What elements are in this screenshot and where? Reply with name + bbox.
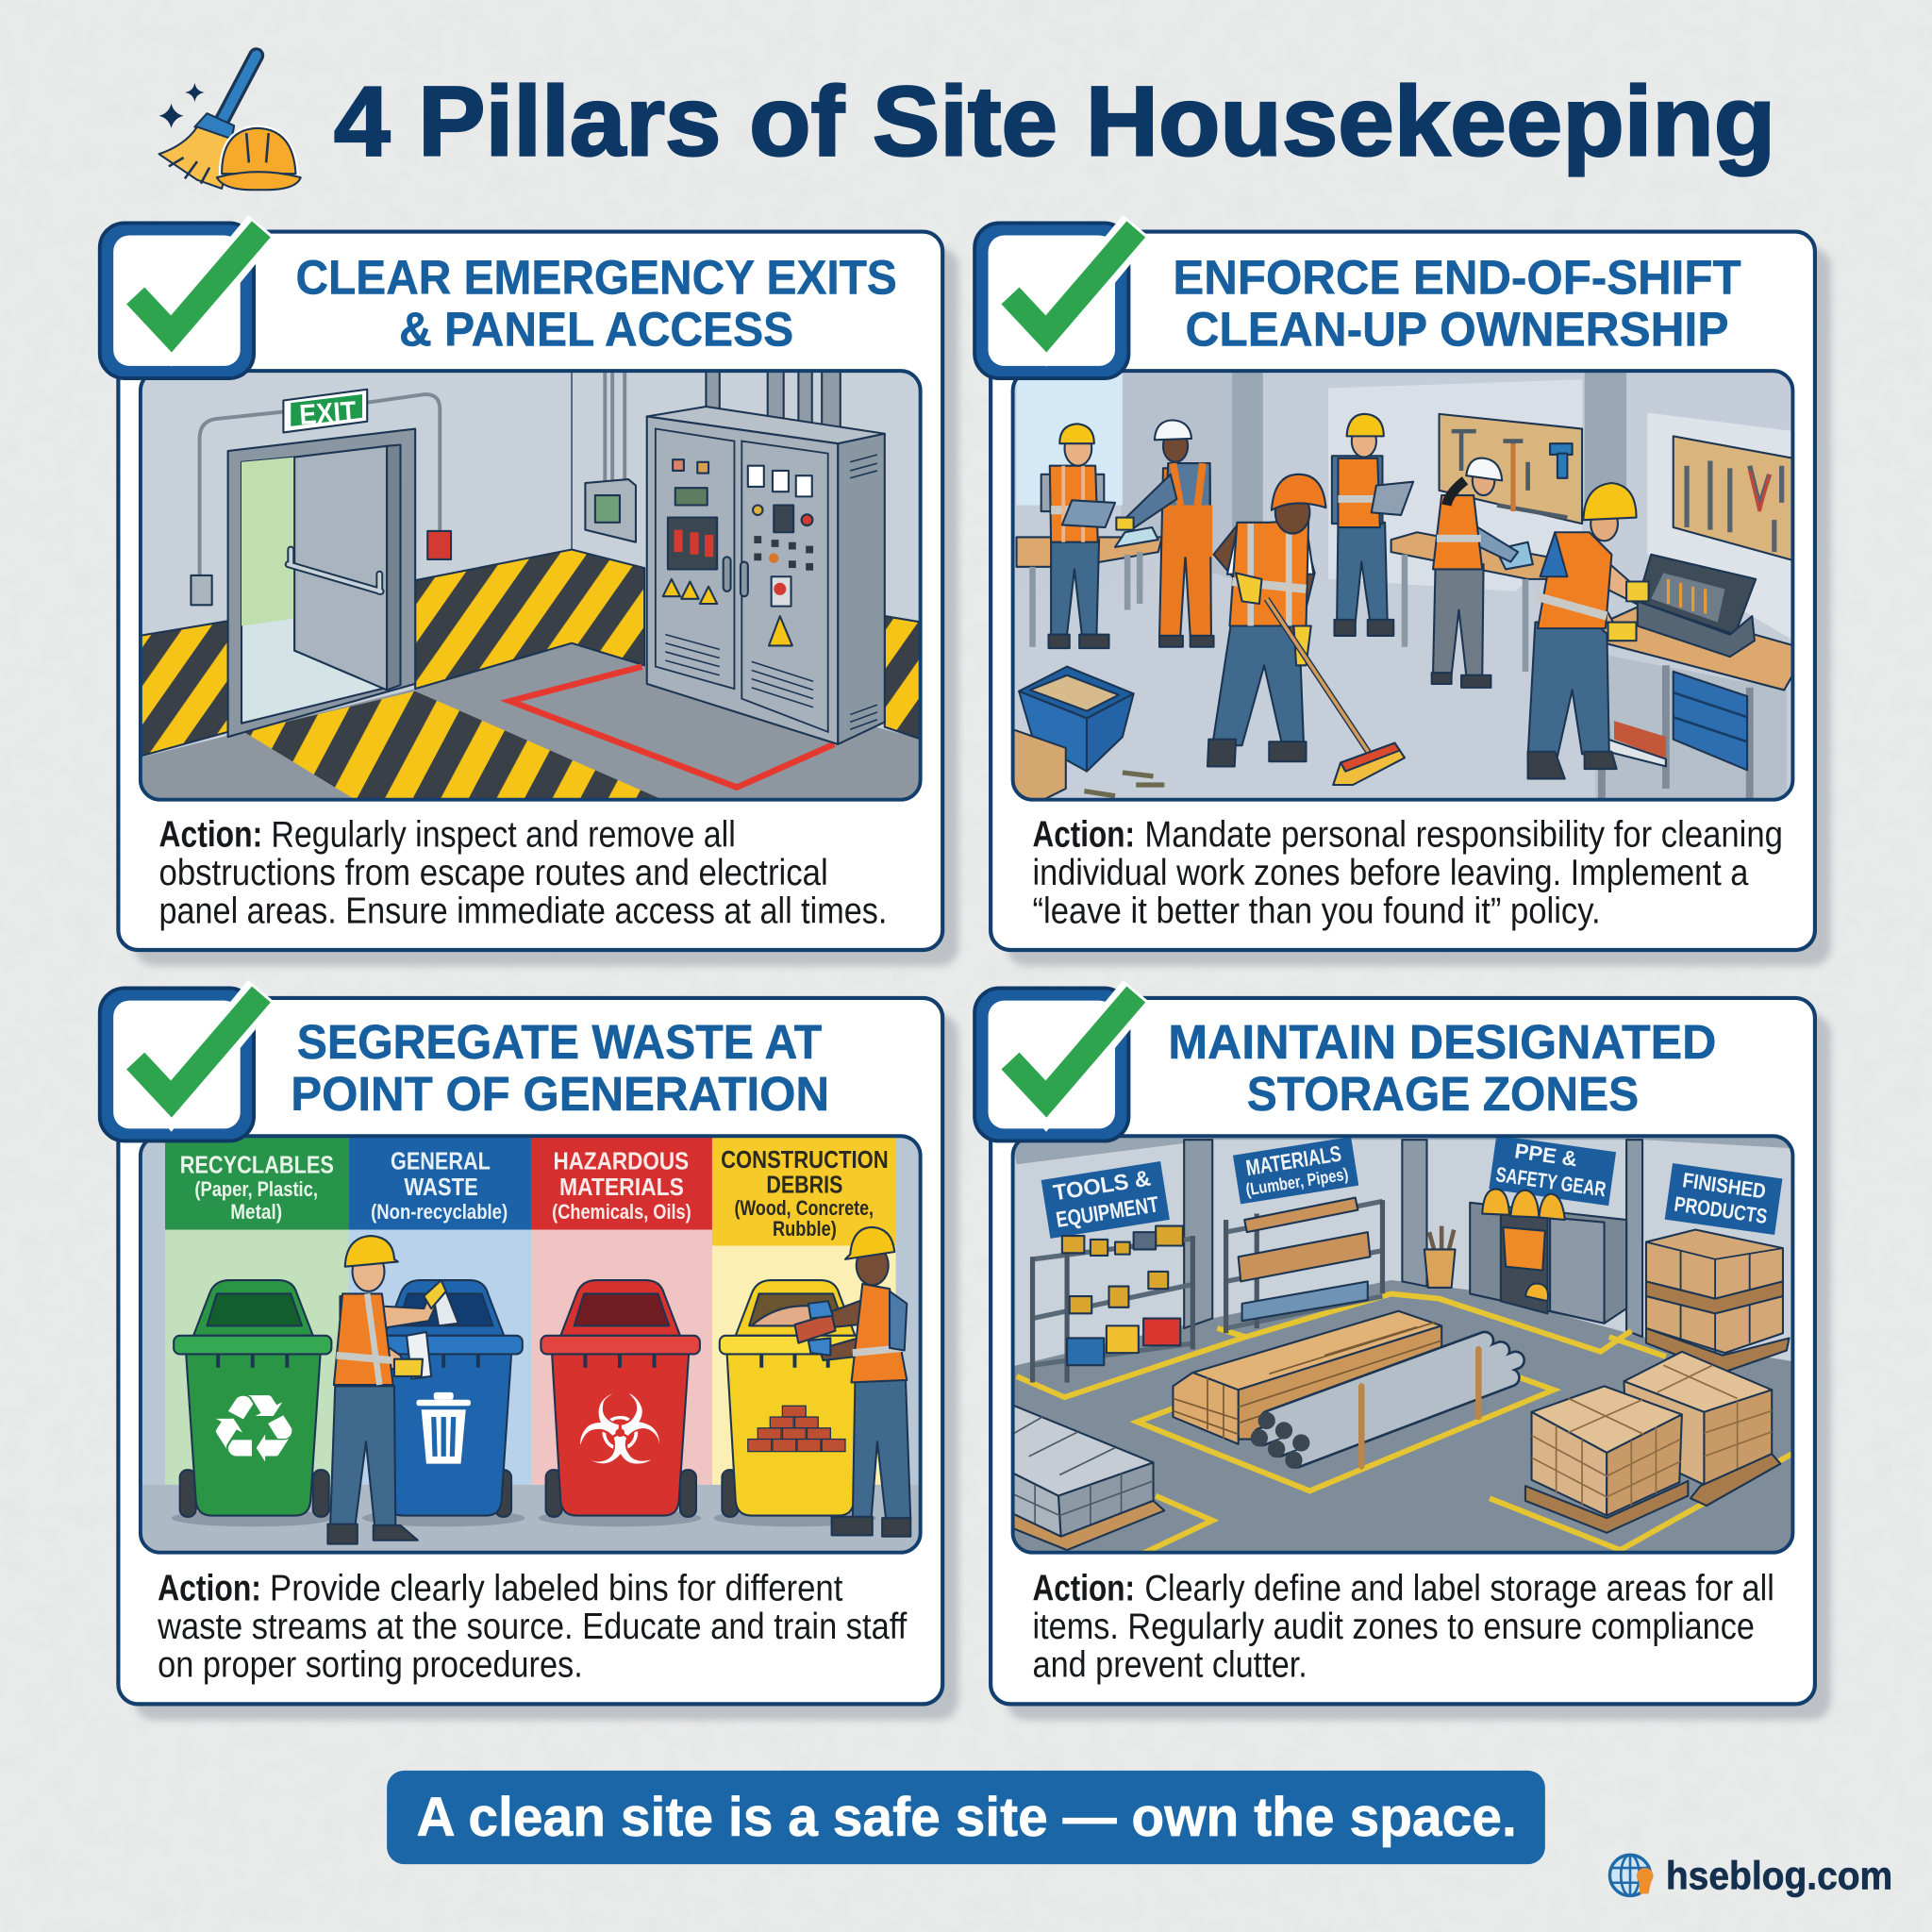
finished product boxes [1646, 1230, 1789, 1373]
category header: construction debris [712, 1135, 896, 1245]
category header: recyclables: RECYCLABLES [180, 1150, 334, 1178]
closing banner: A clean site is a safe site — own the space. [416, 1787, 1517, 1848]
sign: tools and equipment: TOOLS & [1052, 1166, 1152, 1205]
wrapped pallet: rear [1624, 1352, 1780, 1506]
category header: construction debris: Rubble) [773, 1217, 837, 1241]
green bin [172, 1280, 334, 1526]
worker: orange overalls [1115, 420, 1214, 647]
heading [295, 251, 897, 356]
icon: checkbox [100, 989, 262, 1141]
sign: materials: MATERIALS [1244, 1141, 1343, 1180]
category header: construction debris: (Wood, Concrete, [734, 1196, 874, 1220]
illustration: colour-coded waste bins [140, 1135, 922, 1554]
sign: PPE and safety gear: PPE & [1513, 1139, 1579, 1171]
exit sign: EXIT [298, 396, 358, 431]
green bin: ♻ [207, 1375, 301, 1484]
waste bin [1019, 667, 1134, 772]
action text: “leave it better than you found it” policy. [1033, 891, 1601, 931]
alarm box [427, 531, 451, 559]
hazard stripes on walls [140, 550, 922, 757]
red keep-clear floor line [510, 667, 834, 788]
action text: waste streams at the source. Educate and train staff [157, 1607, 907, 1647]
icon: trash can [416, 1392, 471, 1464]
sign: finished products [1665, 1163, 1782, 1235]
heading [1173, 251, 1741, 356]
action text: Action: [158, 814, 262, 855]
action text [157, 1569, 907, 1686]
action text: panel areas. Ensure immediate access at all times. [158, 891, 887, 931]
category header: recyclables: Metal) [230, 1200, 282, 1224]
heading [291, 1015, 829, 1121]
yellow zone markings [1017, 1293, 1794, 1555]
heading: ENFORCE END-OF-SHIFT [1173, 251, 1741, 305]
switch box [191, 575, 212, 605]
sign: finished products: FINISHED [1681, 1168, 1767, 1204]
conduit [200, 370, 625, 575]
heading: POINT OF GENERATION [291, 1067, 829, 1121]
illustration: exit door and electrical panel [140, 370, 922, 801]
illustration: workers cleaning up [1011, 370, 1794, 801]
sign: materials [1233, 1137, 1358, 1204]
door frame [228, 429, 415, 737]
doorway [242, 458, 387, 724]
red bin: ☣ [575, 1375, 664, 1488]
action text: Action: [1033, 814, 1135, 855]
category header: recyclables [165, 1135, 349, 1230]
sign: tools and equipment: EQUIPMENT [1055, 1191, 1161, 1232]
action text: Provide clearly labeled bins for different [270, 1569, 842, 1609]
action text: individual work zones before leaving. Implement a [1033, 853, 1749, 893]
heading: SEGREGATE WASTE AT [297, 1015, 822, 1069]
action text: Action: [1033, 1569, 1135, 1609]
icon: broom and hard hat [158, 56, 301, 190]
category header: construction debris: DEBRIS [766, 1170, 842, 1198]
hazard stripes on floor [244, 691, 665, 801]
worker: placing bricks in bin [794, 1227, 910, 1537]
tool shelf [1033, 1226, 1195, 1382]
icon: globe with bulb [1609, 1855, 1654, 1895]
category header: general waste: GENERAL [391, 1147, 491, 1175]
category header: recyclables: (Paper, Plastic, [194, 1177, 318, 1201]
heading [1168, 1015, 1716, 1121]
pegboard [1440, 414, 1582, 524]
sign: PPE and safety gear: SAFETY GEAR [1494, 1162, 1607, 1201]
worker: clipboard inspector [1041, 424, 1115, 648]
action text [158, 814, 887, 931]
panic bar [289, 550, 381, 591]
category header: general waste [349, 1135, 531, 1230]
action text: Mandate personal responsibility for cleaning [1144, 814, 1783, 855]
action text [1033, 1569, 1774, 1686]
action text: obstructions from escape routes and electrical [158, 853, 828, 893]
action text: Clearly define and label storage areas for all [1144, 1569, 1774, 1609]
worker: sweeping [1208, 475, 1405, 785]
sign: finished products: PRODUCTS [1673, 1192, 1769, 1228]
panel: clear emergency exits [100, 223, 958, 966]
heading: STORAGE ZONES [1247, 1067, 1639, 1121]
title: 4 Pillars of Site Housekeeping [334, 67, 1775, 177]
panel: designated storage zones [974, 989, 1831, 1720]
category header: general waste: WASTE [404, 1173, 478, 1201]
action text: Action: [158, 1569, 261, 1609]
electrical cabinet [647, 407, 885, 744]
closing banner [387, 1771, 1545, 1864]
icon: checkbox [974, 989, 1138, 1141]
panel: end-of-shift clean-up [974, 223, 1831, 966]
grey wrapped stock [1010, 1405, 1164, 1550]
left bench [1017, 537, 1162, 647]
category header: hazardous materials [531, 1135, 712, 1230]
lumber stack [1173, 1311, 1441, 1444]
heading: & PANEL ACCESS [399, 302, 793, 356]
category header: construction debris: CONSTRUCTION [721, 1145, 889, 1174]
icon: checkbox [100, 223, 262, 378]
door leaf [294, 446, 387, 690]
wrapped pallet: front [1525, 1386, 1688, 1533]
category header: hazardous materials: HAZARDOUS [553, 1147, 689, 1175]
pegboard with tools [1674, 436, 1794, 560]
red bin [539, 1280, 701, 1526]
cardboard box [1013, 729, 1066, 801]
workbench with drawers [1595, 604, 1794, 801]
action text [1033, 814, 1783, 931]
wall control box [585, 479, 636, 542]
exit sign [283, 390, 367, 432]
category header: hazardous materials: MATERIALS [559, 1173, 684, 1201]
illustration: warehouse storage zones [1010, 1135, 1794, 1555]
PPE locker [1470, 1189, 1626, 1324]
action text: on proper sorting procedures. [158, 1645, 583, 1686]
blue bin [362, 1280, 525, 1526]
heading: CLEAR EMERGENCY EXITS [295, 251, 897, 305]
bucket of tools [1424, 1226, 1456, 1288]
sign: materials: (Lumber, Pipes) [1244, 1163, 1350, 1199]
icon: brick pile [748, 1406, 845, 1452]
heading: MAINTAIN DESIGNATED [1168, 1015, 1716, 1069]
action text: Regularly inspect and remove all [271, 814, 736, 855]
category header: general waste: (Non-recyclable) [371, 1200, 508, 1224]
yellow bin [713, 1280, 876, 1526]
centre bench [1391, 532, 1547, 672]
worker: female wiping bench [1432, 458, 1518, 688]
action text: items. Regularly audit zones to ensure compliance [1033, 1607, 1755, 1647]
floor scraps [1084, 773, 1164, 796]
worker: at toolbox [1528, 483, 1649, 778]
sign: tools and equipment [1041, 1161, 1170, 1239]
pipes into cabinet [705, 373, 841, 426]
toolbox [1638, 555, 1756, 657]
worker: clipboard at bench [1332, 414, 1413, 636]
worker: placing bottle in bin [327, 1236, 458, 1544]
material rack [1226, 1198, 1382, 1333]
panel: segregate waste [100, 989, 958, 1720]
action text: and prevent clutter. [1033, 1645, 1307, 1686]
category header: hazardous materials: (Chemicals, Oils) [552, 1200, 691, 1224]
heading: CLEAN-UP OWNERSHIP [1185, 302, 1728, 356]
sign: PPE and safety gear [1489, 1135, 1616, 1206]
icon: checkbox [974, 223, 1138, 378]
steel pipes [1251, 1341, 1516, 1469]
logo: hseblog.com: hseblog.com [1666, 1853, 1892, 1897]
